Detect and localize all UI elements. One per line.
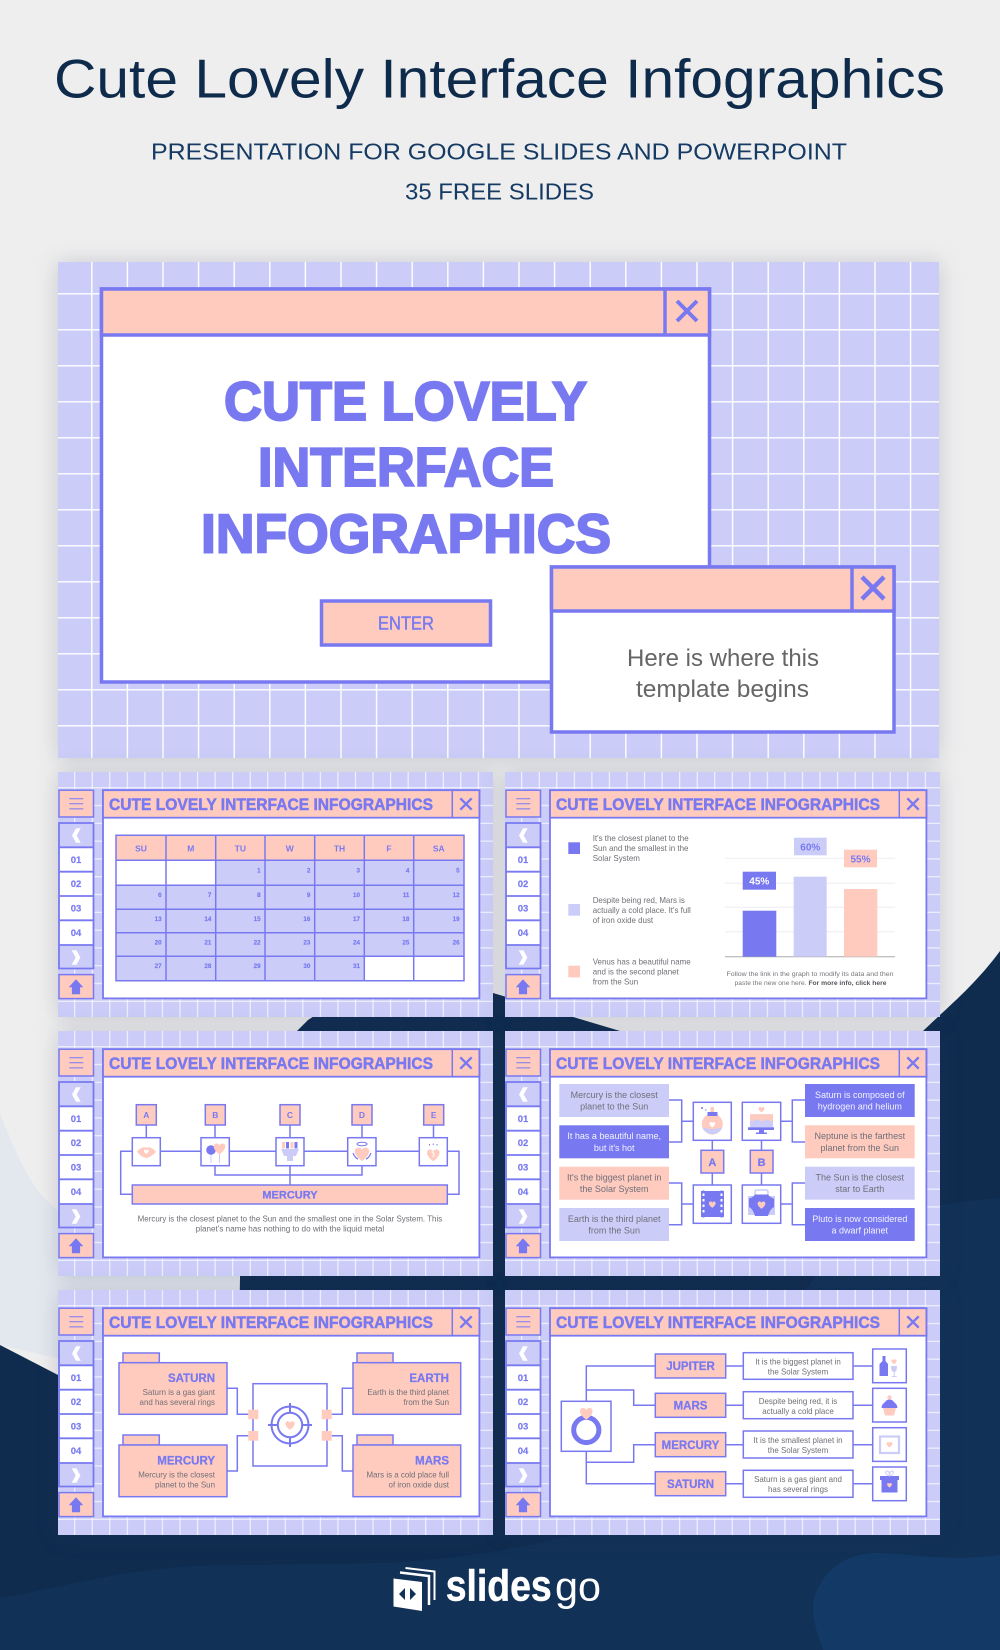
right text boxes: hydrogen and helium [818,1102,902,1112]
center target box [248,1384,332,1466]
folder: earth [353,1353,461,1414]
legend: It's the closest planet to the [593,834,689,843]
legend: Despite being red, Mars is [593,896,685,905]
calendar table: F [386,843,392,853]
navigation numbers: 01 [71,1373,82,1384]
enter button [322,601,490,645]
folder: earth: from the Sun [404,1398,449,1407]
folder: mercury: Mercury is the closest [138,1470,216,1480]
calendar table: 25 [402,940,410,946]
description boxes: actually a cold place [762,1407,834,1416]
icon: wine bottle and glass [873,1349,906,1383]
panel: calendar slide [58,772,493,1017]
calendar table: 12 [453,892,460,899]
slide frame [58,1290,493,1535]
slidesgo logo [394,1562,552,1611]
navigation numbers: 04 [518,1187,529,1198]
folder: mars: of iron oxide dust [389,1480,450,1489]
legend: Sun and the smallest in the [593,844,689,853]
popup window: template begins [636,676,809,703]
navigation numbers: 03 [71,1422,81,1432]
calendar table: TH [334,843,345,853]
planet name boxes: MARS [674,1400,708,1412]
calendar table [116,835,464,981]
legend: from the Sun [593,978,638,986]
legend [568,834,691,986]
planet name boxes: SATURN [667,1479,714,1491]
description boxes [743,1353,853,1497]
right text boxes: The Sun is the closest [816,1172,905,1182]
folder: saturn: and has several rings [140,1398,215,1407]
icon: broken heart [419,1138,447,1166]
calendar table: 1 [257,868,261,874]
legend: Venus has a beautiful name [593,958,691,966]
slide frame [505,1290,940,1535]
description boxes: has several rings [768,1485,828,1494]
slide frame [58,772,493,1017]
calendar table: 14 [204,916,212,923]
calendar table: 10 [353,892,360,899]
planet name boxes: MERCURY [662,1440,720,1452]
calendar table: 27 [155,963,162,970]
legend: Solar System [593,854,640,863]
navigation numbers: 04 [518,928,529,939]
bar chart: 60% [800,842,820,853]
background shape: pale blue blob [0,1114,239,1400]
calendar table: 2 [307,868,311,874]
navigation numbers: 04 [71,1187,82,1198]
navigation numbers: 01 [518,1373,529,1384]
calendar table: 15 [254,916,261,923]
slide title: CUTE LOVELY INTERFACE INFOGRAPHICS [109,795,433,814]
connector lines [227,1388,353,1471]
right text boxes: Pluto is now considered [812,1214,907,1224]
description boxes: the Solar System [768,1368,829,1376]
chart caption: Follow the link in the graph to modify its data and then [726,971,894,978]
navigation numbers: 04 [71,928,82,939]
navigation numbers: 03 [518,1162,528,1174]
navigation numbers: 02 [71,1138,81,1149]
connector lines [669,1100,805,1225]
main title: Cute Lovely Interface Infographics [54,48,945,110]
icon: stacked slides [394,1568,434,1611]
A and B boxes: B [758,1157,766,1169]
icon: film strip [693,1185,731,1223]
subtitle line one: PRESENTATION FOR GOOGLE SLIDES AND POWERPOINT [151,138,847,164]
right text boxes: a dwarf planet [832,1226,889,1236]
calendar table: 11 [403,892,410,899]
calendar table: 26 [453,940,460,946]
panel: process diagram slide [58,1031,493,1276]
mercury description: Mercury is the closest planet to the Sun and the smallest one in the Solar System. This [138,1215,442,1224]
calendar table: 30 [303,963,311,970]
calendar table: 5 [456,868,460,874]
connector lines [586,1366,873,1484]
icon: picture frame [873,1428,906,1461]
panel: bar chart slide [505,772,940,1017]
calendar table: 7 [208,892,212,899]
navigation numbers: 02 [71,1397,81,1408]
panel: tree diagram slide [505,1290,940,1535]
calendar table: 19 [453,916,460,923]
calendar table: 23 [303,940,311,946]
letter boxes: B [212,1110,218,1120]
calendar table: 21 [204,940,212,946]
calendar table: SU [135,843,147,853]
legend: and is the second planet [593,968,680,976]
chart caption: paste the new one here. For more info, click here [734,980,887,987]
calendar table: W [286,843,295,853]
left text boxes: planet to the Sun [580,1102,648,1112]
right text boxes [805,1084,915,1241]
popup window [552,567,894,732]
legend: of iron oxide dust [593,916,654,925]
icon: cupcake [873,1388,906,1422]
icon: gift box [873,1467,906,1501]
A and B boxes [701,1150,773,1173]
folder: mercury: MERCURY [157,1456,215,1468]
description boxes: Despite being red, it is [759,1397,837,1406]
legend: actually a cold place. It's full [593,906,691,915]
description boxes: It is the biggest planet in [755,1358,841,1366]
slide frame [505,1031,940,1276]
mercury bar [132,1185,447,1204]
popup window: Here is where this [627,645,819,672]
cover heading: INFOGRAPHICS [201,502,611,564]
calendar table: 8 [257,892,261,899]
icon: winged heart [348,1138,376,1166]
bar chart [725,838,895,957]
left text boxes: It's the biggest planet in [567,1172,661,1182]
calendar table: 22 [254,940,261,946]
wordmark: slides [446,1562,552,1611]
navigation numbers: 03 [518,1422,528,1432]
icon: target with heart [268,1403,312,1447]
letter boxes: A [143,1110,149,1120]
navigation numbers: 02 [518,1397,528,1408]
letter boxes: E [431,1110,437,1120]
calendar table: 18 [402,916,410,923]
description boxes: It is the smallest planet in [753,1436,843,1445]
calendar table: 20 [155,940,162,946]
right text boxes: planet from the Sun [821,1143,899,1153]
navigation numbers: 02 [518,1138,528,1149]
folder: mars: Mars is a cold place full [366,1470,449,1480]
slide title: CUTE LOVELY INTERFACE INFOGRAPHICS [556,1313,880,1332]
left text boxes: the Solar System [580,1184,648,1194]
navigation numbers: 04 [71,1446,82,1457]
enter button: ENTER [378,614,434,634]
cover heading [201,370,611,564]
letter boxes: D [359,1110,365,1120]
calendar table: 6 [158,892,162,899]
connector lines [121,1125,459,1194]
mercury description: planet's name has nothing to do with the liquid metal [196,1225,384,1234]
calendar table: M [187,843,194,853]
panel: two-column mind map slide [505,1031,940,1276]
calendar table: SA [433,843,445,853]
folder: mars [353,1435,461,1497]
icon: lips [132,1138,160,1166]
cover heading: CUTE LOVELY [224,370,587,432]
panel: main cover slide [58,262,939,758]
chart caption [726,971,894,987]
A and B boxes: A [708,1157,716,1169]
icon: balloons [201,1138,229,1166]
mercury description [138,1215,442,1234]
calendar table: 13 [155,916,162,923]
folder: mars: MARS [415,1456,449,1468]
folder: saturn: Saturn is a gas giant [143,1388,216,1397]
slide title: CUTE LOVELY INTERFACE INFOGRAPHICS [556,795,880,814]
background shape: mid navy wave [0,1198,1000,1650]
planet name boxes [655,1354,726,1496]
folder: mercury: planet to the Sun [155,1480,215,1489]
navigation numbers: 03 [71,1162,81,1174]
icon: ring [561,1401,611,1451]
navigation numbers: 02 [71,879,81,890]
calendar table: 28 [204,963,212,970]
left text boxes: It has a beautiful name, [567,1131,661,1141]
left text boxes: Earth is the third planet [568,1214,661,1224]
description boxes: the Solar System [768,1446,829,1455]
folder: saturn [119,1353,227,1414]
navigation numbers: 04 [518,1446,529,1457]
left text boxes: Mercury is the closest [571,1090,658,1100]
bar chart: 45% [749,876,769,888]
calendar table: 24 [353,940,360,946]
icon: hand with candles [276,1138,304,1166]
calendar table: 17 [353,916,360,923]
navigation numbers: 01 [71,855,82,866]
icon: perfume bottle [693,1102,731,1140]
navigation numbers: 03 [71,904,81,914]
background shape: navy wave [0,951,1000,1650]
bar chart: 55% [850,854,871,865]
right text boxes: star to Earth [835,1184,884,1194]
folder: earth: Earth is the third planet [367,1388,450,1397]
left text boxes: but it's hot [594,1143,635,1153]
subtitle line two: 35 FREE SLIDES [405,178,594,204]
cover slide background grid [58,262,939,758]
calendar table: 31 [353,963,360,970]
navigation numbers: 01 [518,1114,529,1125]
letter boxes [136,1105,444,1125]
calendar table: TU [235,843,246,853]
wordmark suffix: go [555,1564,601,1610]
planet name boxes: JUPITER [666,1361,715,1373]
navigation numbers: 02 [518,879,528,890]
icon: bag [742,1185,781,1223]
folder: saturn: SATURN [168,1373,215,1385]
right text boxes: Saturn is composed of [815,1090,905,1100]
background shape: lighter navy blob [813,1553,1000,1650]
cover heading: INTERFACE [258,436,554,498]
calendar table: 16 [303,916,311,923]
navigation numbers: 03 [518,904,528,914]
navigation numbers: 01 [518,855,529,866]
slide frame [505,772,940,1017]
icon: cake [742,1102,781,1140]
letter boxes: C [287,1110,293,1120]
right text boxes: Neptune is the farthest [815,1131,906,1141]
calendar table: 9 [307,892,311,899]
slide frame [58,1031,493,1276]
navigation numbers: 01 [71,1114,82,1125]
left text boxes [559,1084,669,1241]
panel: folders slide [58,1290,493,1535]
folder: mercury [119,1435,227,1497]
mercury bar: MERCURY [262,1190,318,1202]
main window [102,289,710,682]
calendar table: 4 [406,868,410,874]
left text boxes: from the Sun [588,1226,640,1236]
slide title: CUTE LOVELY INTERFACE INFOGRAPHICS [556,1054,880,1073]
slide title: CUTE LOVELY INTERFACE INFOGRAPHICS [109,1313,433,1332]
slide title: CUTE LOVELY INTERFACE INFOGRAPHICS [109,1054,433,1073]
folder: earth: EARTH [409,1373,449,1385]
calendar table: 3 [356,868,360,874]
calendar table: 29 [254,963,261,970]
description boxes: Saturn is a gas giant and [754,1475,842,1484]
